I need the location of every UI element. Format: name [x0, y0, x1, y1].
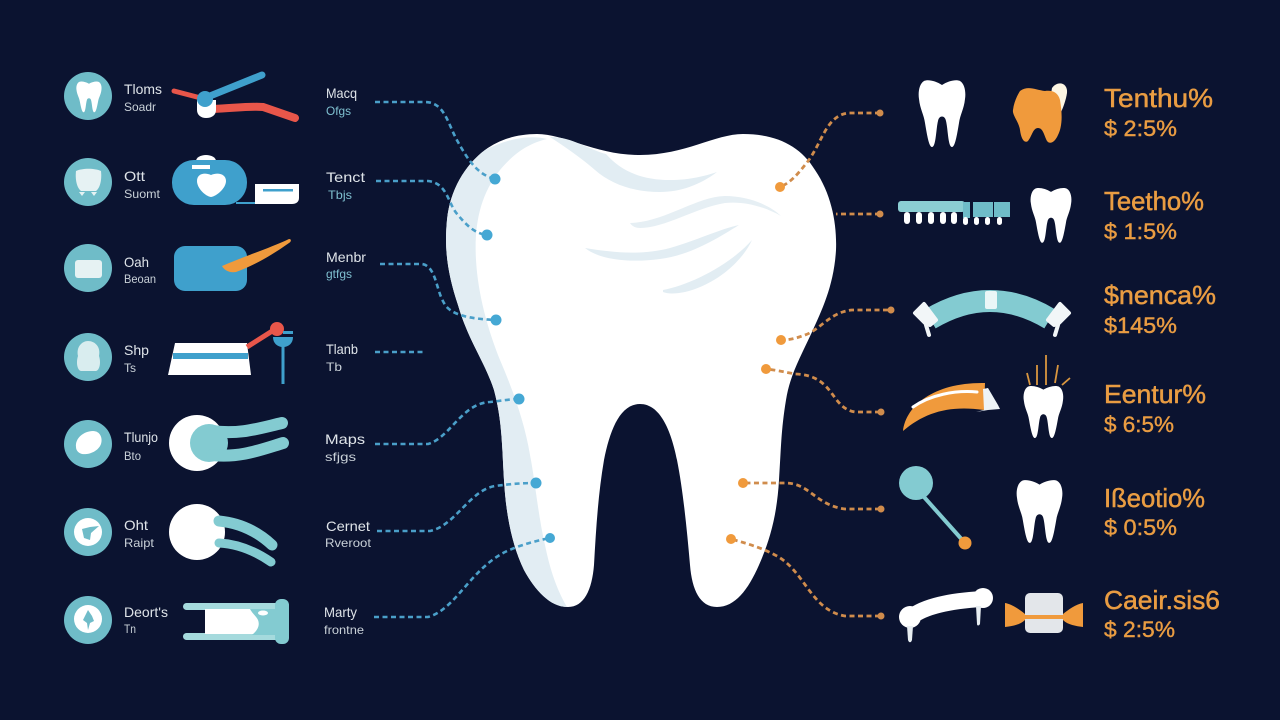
right row 6: Caeir.sis6 — [1104, 585, 1220, 615]
middle labels column: Tbjs — [328, 188, 352, 202]
left row 3: Beoan — [124, 272, 156, 286]
middle labels column: Menbr — [326, 249, 366, 265]
middle labels column: Tlanb — [326, 341, 358, 357]
middle labels column: Tenct — [326, 169, 365, 185]
right row 3: $nenca% — [1104, 280, 1216, 310]
left row 7: Tn — [124, 622, 136, 636]
central tooth — [446, 134, 836, 607]
left row 1: Soadr — [124, 100, 156, 114]
right row 5: Ißeotio% — [1104, 483, 1205, 513]
left row 6: Raipt — [124, 536, 155, 550]
left row 2: Ott — [124, 168, 145, 184]
middle labels column: Rveroot — [325, 536, 372, 550]
right row 1: $ 2:5% — [1104, 116, 1177, 141]
right row 3 — [915, 280, 1216, 338]
right row 6 — [899, 585, 1220, 642]
connector lines: right orange — [726, 110, 894, 620]
right row 5: $ 0:5% — [1104, 515, 1177, 540]
left row 4: Shp — [124, 342, 149, 358]
left row 6 — [64, 504, 272, 562]
left row 2 — [64, 155, 299, 206]
middle labels column: gtfgs — [326, 267, 352, 281]
right row 2: Teetho% — [1104, 186, 1204, 216]
left row 2: Suomt — [124, 187, 161, 201]
right row 1: Tenthu% — [1104, 83, 1213, 113]
left row 1: Tloms — [124, 81, 162, 97]
left row 3 — [64, 239, 291, 292]
right row 2: $ 1:5% — [1104, 219, 1177, 244]
right row 4: Eentur% — [1104, 379, 1206, 409]
middle labels column: Maps — [325, 431, 365, 447]
right row 4 — [903, 355, 1206, 438]
right row 5 — [899, 466, 1205, 550]
left row 4: Ts — [124, 361, 136, 375]
middle labels column: sfjgs — [325, 450, 356, 464]
left row 4 — [64, 322, 293, 384]
middle labels column — [324, 85, 372, 637]
right row 6: $ 2:5% — [1104, 617, 1175, 642]
right row 2 — [898, 186, 1204, 244]
middle labels column: Ofgs — [326, 104, 351, 118]
middle labels column: Marty — [324, 604, 357, 620]
right row 1 — [919, 80, 1213, 147]
left row 7: Deort's — [124, 604, 168, 620]
right row 4: $ 6:5% — [1104, 412, 1174, 437]
connector lines: left blue — [374, 102, 555, 617]
left row 6: Oht — [124, 517, 148, 533]
middle labels column: frontne — [324, 623, 364, 637]
left row 3: Oah — [124, 254, 149, 270]
middle labels column: Tb — [326, 360, 342, 374]
left row 1 — [64, 72, 295, 120]
middle labels column: Macq — [326, 85, 357, 101]
left row 5 — [64, 415, 283, 471]
right row 3: $145% — [1104, 313, 1177, 338]
middle labels column: Cernet — [326, 518, 370, 534]
left row 5: Tlunjo — [124, 429, 158, 445]
left row 5: Bto — [124, 449, 141, 463]
left row 7 — [64, 596, 289, 644]
